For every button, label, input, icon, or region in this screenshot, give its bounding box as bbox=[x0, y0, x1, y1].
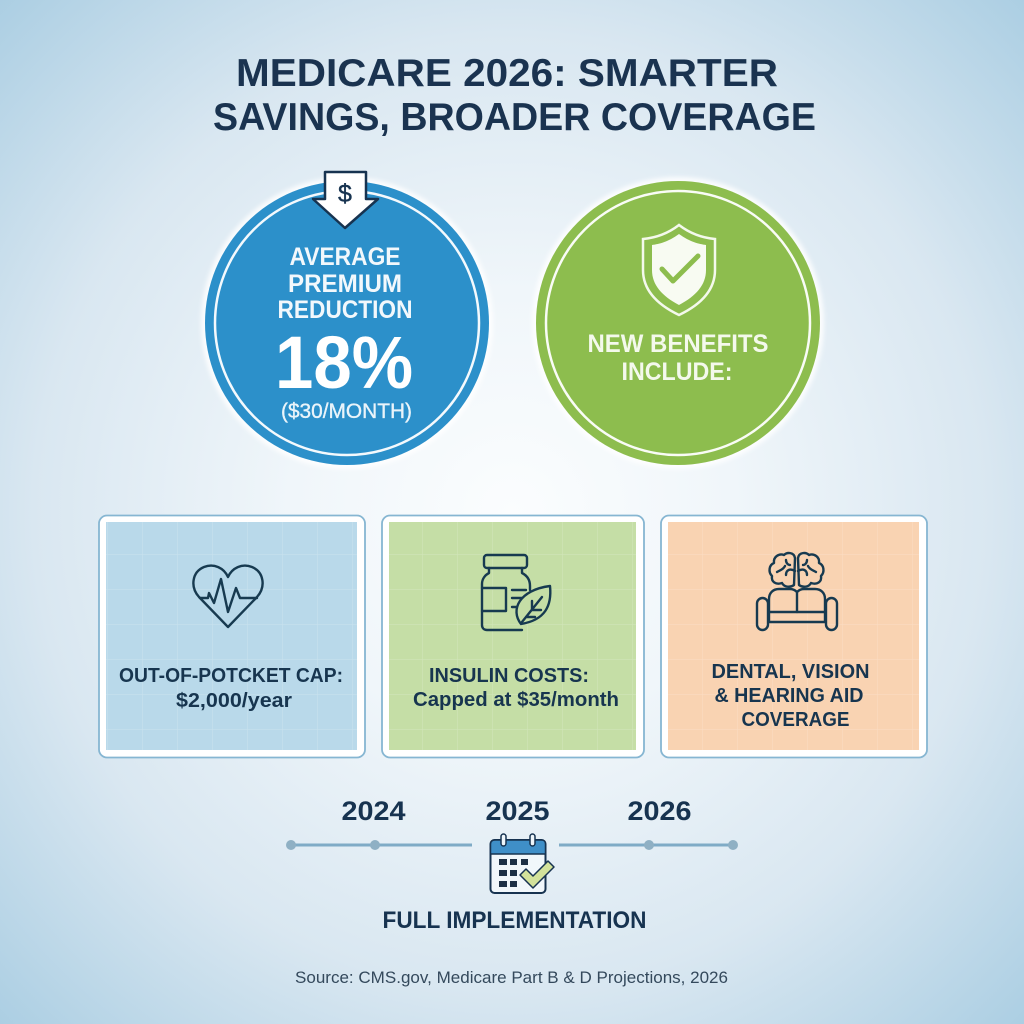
premium label: AVERAGE bbox=[290, 243, 400, 271]
premium label: PREMIUM bbox=[288, 270, 402, 298]
timeline years: 2025 bbox=[486, 796, 550, 826]
panel: out-of-pocket cap bbox=[99, 516, 365, 758]
panel: dental, vision and hearing bbox=[661, 516, 927, 758]
panel: new benefits bbox=[532, 177, 824, 469]
icon: shield with check bbox=[643, 225, 715, 315]
benefits label bbox=[588, 330, 768, 386]
icon: calendar with check bbox=[490, 834, 554, 893]
timeline label: FULL IMPLEMENTATION bbox=[382, 907, 646, 934]
icon: heart with pulse bbox=[193, 566, 263, 627]
monthly saving: ($30/MONTH) bbox=[281, 400, 412, 423]
title bbox=[213, 52, 816, 139]
timeline bbox=[286, 796, 738, 934]
card text: DENTAL, VISION bbox=[712, 660, 870, 683]
card text: & HEARING AID bbox=[714, 684, 864, 707]
premium label bbox=[278, 243, 412, 324]
timeline line and markers bbox=[286, 840, 738, 850]
title: MEDICARE 2026: SMARTER bbox=[236, 52, 778, 95]
card text bbox=[413, 664, 619, 711]
card text: COVERAGE bbox=[742, 708, 850, 731]
timeline years: 2026 bbox=[628, 796, 692, 826]
timeline years: 2024 bbox=[342, 796, 406, 826]
benefits label: NEW BENEFITS bbox=[588, 330, 768, 358]
benefits label: INCLUDE: bbox=[622, 358, 732, 386]
big number 18%: 18% bbox=[275, 321, 413, 404]
card text: INSULIN COSTS: bbox=[429, 664, 589, 687]
source note: Source: CMS.gov, Medicare Part B & D Projections, 2026 bbox=[295, 968, 728, 987]
premium label: REDUCTION bbox=[278, 296, 412, 324]
panel: average premium reduction bbox=[201, 172, 493, 469]
title: SAVINGS, BROADER COVERAGE bbox=[213, 96, 816, 139]
icon: brain above sofa bbox=[757, 553, 837, 630]
card text bbox=[712, 660, 870, 731]
card text: $2,000/year bbox=[176, 689, 292, 712]
card text: OUT-OF-POTCKET CAP: bbox=[119, 664, 343, 687]
icon: down arrow with dollar: $ bbox=[338, 180, 352, 208]
card text: Capped at $35/month bbox=[413, 688, 619, 711]
icon: medicine jar and leaf bbox=[482, 555, 550, 630]
icon: down arrow with dollar bbox=[313, 172, 378, 228]
panel: insulin costs bbox=[382, 516, 644, 758]
timeline years bbox=[342, 796, 692, 826]
card text bbox=[119, 664, 343, 712]
